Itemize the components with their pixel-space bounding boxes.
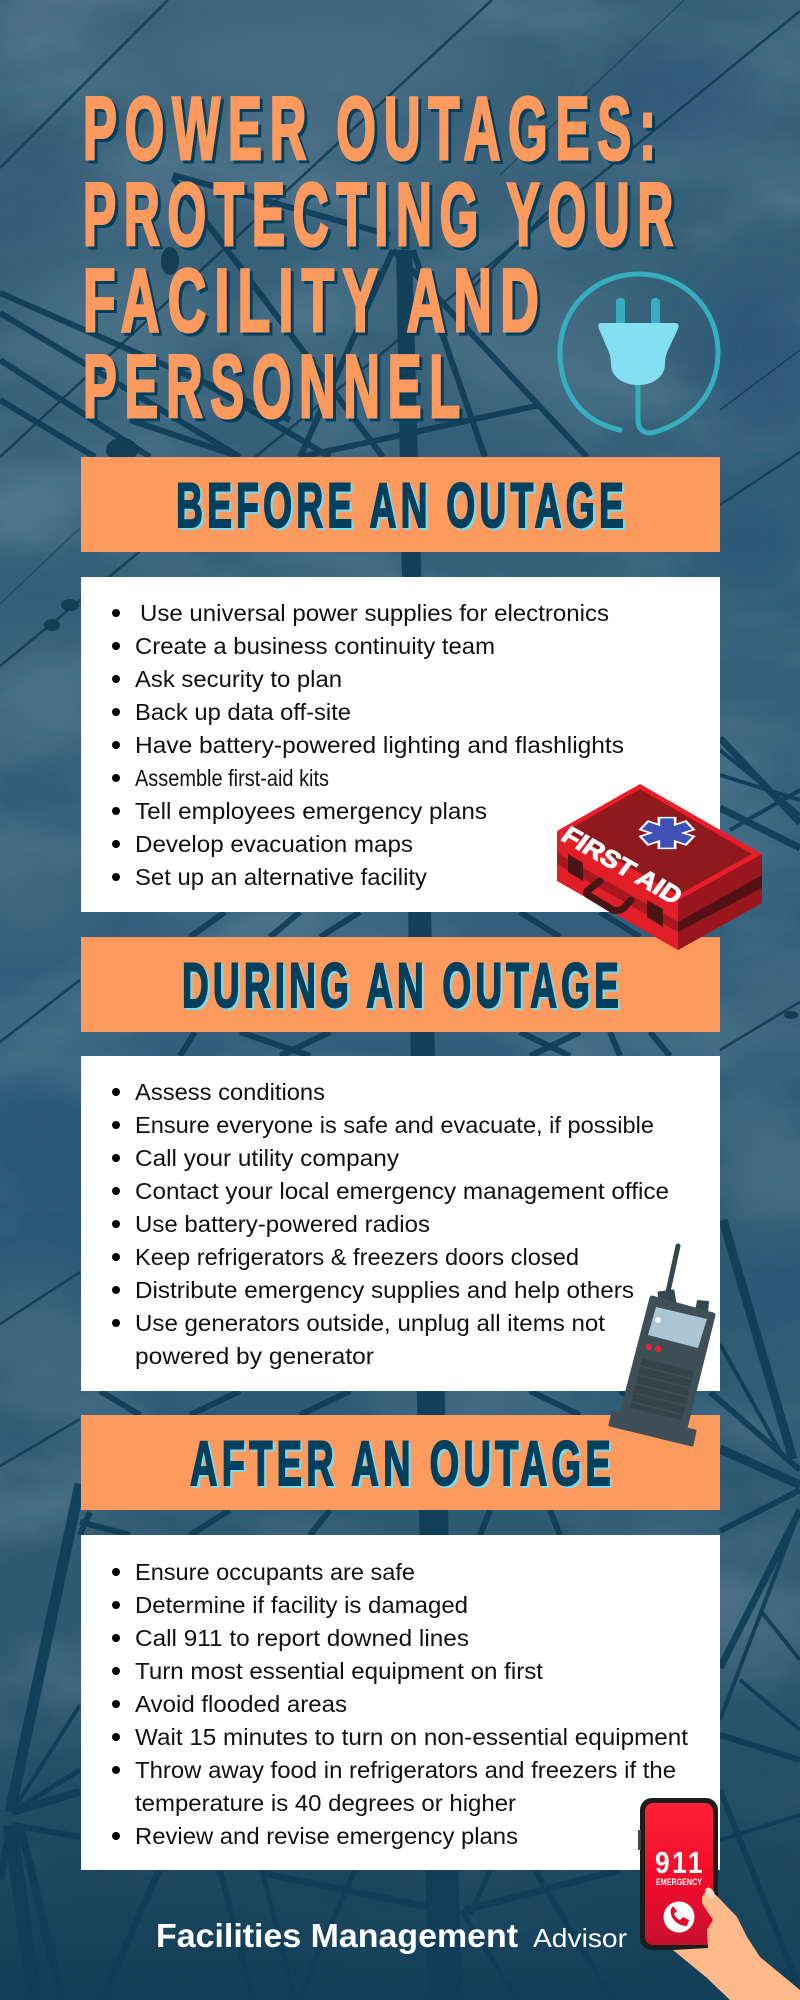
icon: hand holding phone showing 911 emergency (638, 1798, 800, 2000)
footer logo text: Facilities Management (156, 1917, 518, 1954)
panel: after an outage list: Ensure occupants are safe (135, 1559, 415, 1585)
panel: after an outage list: Throw away food in refrigerators and freezers if the (135, 1757, 676, 1783)
icon: hand holding phone showing 911 emergency: EMERGENCY (656, 1877, 702, 1888)
panel: during an outage list: Distribute emergency supplies and help others (135, 1277, 634, 1303)
banner: after an outage (81, 1415, 720, 1510)
panel: before an outage list: Assemble first-aid kits (135, 765, 329, 791)
panel: during an outage list (81, 1056, 720, 1391)
panel: after an outage list: temperature is 40 degrees or higher (135, 1790, 516, 1816)
star of life (651, 822, 683, 844)
panel: during an outage list: Assess conditions (135, 1079, 325, 1105)
icon: power plug in ring (560, 274, 718, 433)
first aid label: FIRST AID (556, 822, 688, 910)
panel: during an outage list: Use generators outside, unplug all items not (135, 1310, 606, 1336)
panel: before an outage list: Develop evacuation maps (135, 831, 413, 857)
insulators (44, 247, 798, 1019)
panel: before an outage list: Have battery-powered lighting and flashlights (135, 732, 624, 758)
panel: before an outage list (81, 577, 720, 912)
overhead wires (0, 0, 800, 1466)
panel: during an outage list: Call your utility company (135, 1145, 400, 1171)
title: PERSONNEL (83, 336, 468, 436)
footer logo text: Advisor (533, 1923, 627, 1953)
banner: during an outage (81, 937, 720, 1032)
icon: first aid kit (556, 784, 762, 950)
panel: after an outage list: Determine if facility is damaged (135, 1592, 468, 1618)
panel: during an outage list: Keep refrigerators & freezers doors closed (135, 1244, 579, 1270)
panel: during an outage list: Ensure everyone is safe and evacuate, if possible (135, 1112, 654, 1138)
panel: during an outage list: Contact your local emergency management office (135, 1178, 669, 1204)
panel: before an outage list: Ask security to plan (135, 666, 342, 692)
panel: before an outage list: Create a business continuity team (135, 633, 495, 659)
panel: after an outage list (81, 1535, 720, 1870)
icon: walkie-talkie radio (610, 1246, 713, 1445)
panel: before an outage list: Tell employees emergency plans (135, 798, 487, 824)
panel: after an outage list: Avoid flooded areas (135, 1691, 347, 1717)
panel: before an outage list: Set up an alternative facility (135, 864, 428, 890)
panel: before an outage list: Use universal power supplies for electronics (140, 600, 609, 626)
title (83, 78, 681, 436)
banner: before an outage (81, 457, 720, 552)
panel: after an outage list: Review and revise emergency plans (135, 1823, 518, 1849)
panel: before an outage list: Back up data off-site (135, 699, 351, 725)
panel: after an outage list: Wait 15 minutes to turn on non-essential equipment (135, 1724, 689, 1750)
panel: during an outage list: Use battery-powered radios (135, 1211, 430, 1237)
panel: after an outage list: Call 911 to report downed lines (135, 1625, 469, 1651)
panel: after an outage list: Turn most essential equipment on first (135, 1658, 544, 1684)
icon: hand holding phone showing 911 emergency: 911 (655, 1845, 705, 1880)
panel: during an outage list: powered by generator (135, 1343, 374, 1369)
